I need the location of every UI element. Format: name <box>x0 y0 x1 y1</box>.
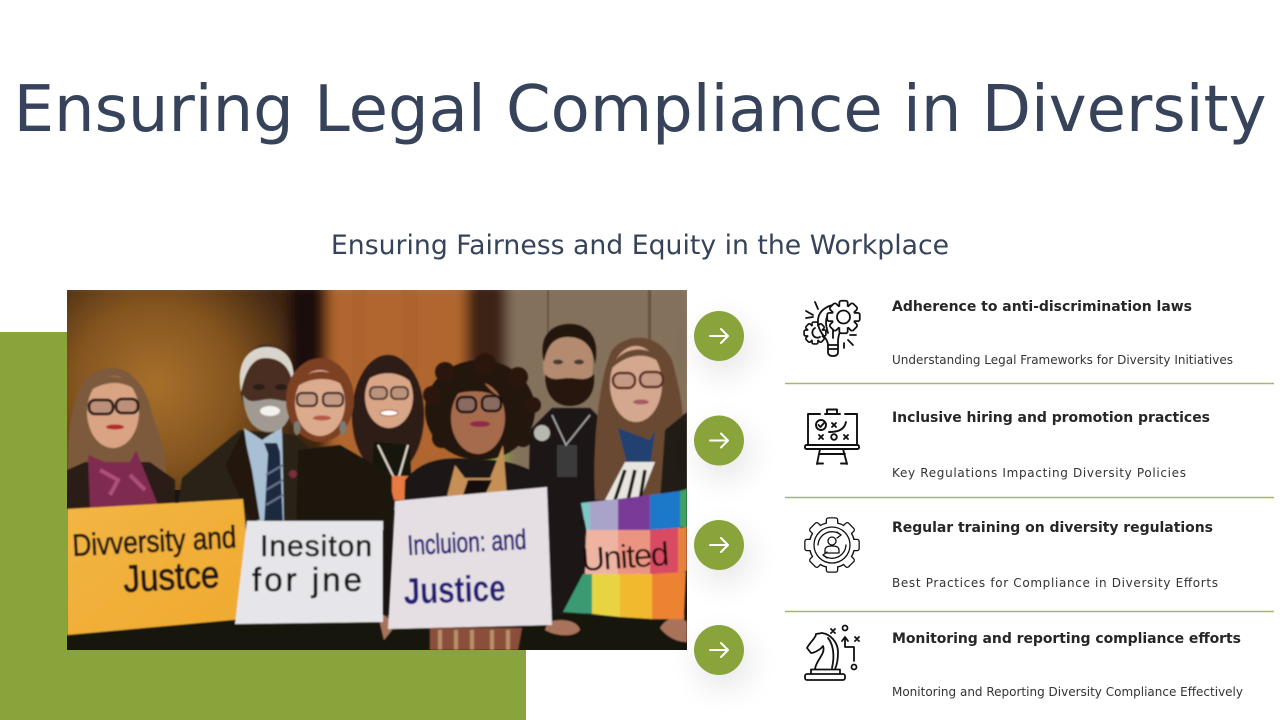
title: Ensuring Legal Compliance in Diversity <box>14 73 1266 147</box>
photo: group holding diversity signs <box>50 280 697 660</box>
arrow button 3 <box>694 520 750 583</box>
woman 1 left <box>67 368 175 510</box>
description 3: Best Practices for Compliance in Diversity Efforts <box>892 576 1218 590</box>
description 1: Understanding Legal Frameworks for Diversity Initiatives <box>892 353 1233 367</box>
sign: Inclusion and Justice: Incluion: and <box>407 524 527 561</box>
man in back, bearded <box>528 323 606 521</box>
sign: rainbow United: United <box>580 535 670 578</box>
heading 1: Adherence to anti-discrimination laws <box>892 299 1192 315</box>
sign: Inesiton for jne: for jne <box>252 561 362 598</box>
sign: Inclusion and Justice <box>388 487 552 629</box>
woman with curly hair <box>404 353 586 616</box>
woman far right <box>594 338 687 500</box>
arrow button 1 <box>694 311 750 374</box>
man with white hair <box>178 344 311 529</box>
description 4: Monitoring and Reporting Diversity Compliance Effectively <box>892 685 1243 699</box>
heading 3: Regular training on diversity regulations <box>892 520 1213 536</box>
subtitle: Ensuring Fairness and Equity in the Workplace <box>331 230 949 261</box>
woman 4 <box>352 355 424 510</box>
sign: Diversity and Justice: Divversity and <box>72 519 237 563</box>
bottom shadow area <box>67 615 687 650</box>
sign: Inesiton for jne: Inesiton <box>260 530 372 563</box>
sign: Diversity and Justice: Justce <box>122 554 220 601</box>
icon: strategy board on easel <box>805 410 859 464</box>
sign: Diversity and Justice <box>67 499 254 635</box>
icon: chess knight with strategy marks <box>805 626 859 680</box>
icon: lightbulb with gears <box>805 302 859 356</box>
sign: Inesiton for jne <box>235 521 383 624</box>
icon: gear with person <box>806 518 858 572</box>
green background block <box>0 332 526 720</box>
heading 4: Monitoring and reporting compliance efforts <box>892 631 1241 647</box>
arrow button 2 <box>694 416 750 479</box>
description 2: Key Regulations Impacting Diversity Policies <box>892 466 1186 480</box>
sign: rainbow United <box>563 489 687 619</box>
woman 3 auburn hair <box>286 358 392 530</box>
arrow button 4 <box>694 625 750 688</box>
hands <box>378 614 687 644</box>
sign: Inclusion and Justice: Justice <box>403 567 506 612</box>
heading 2: Inclusive hiring and promotion practices <box>892 410 1210 426</box>
